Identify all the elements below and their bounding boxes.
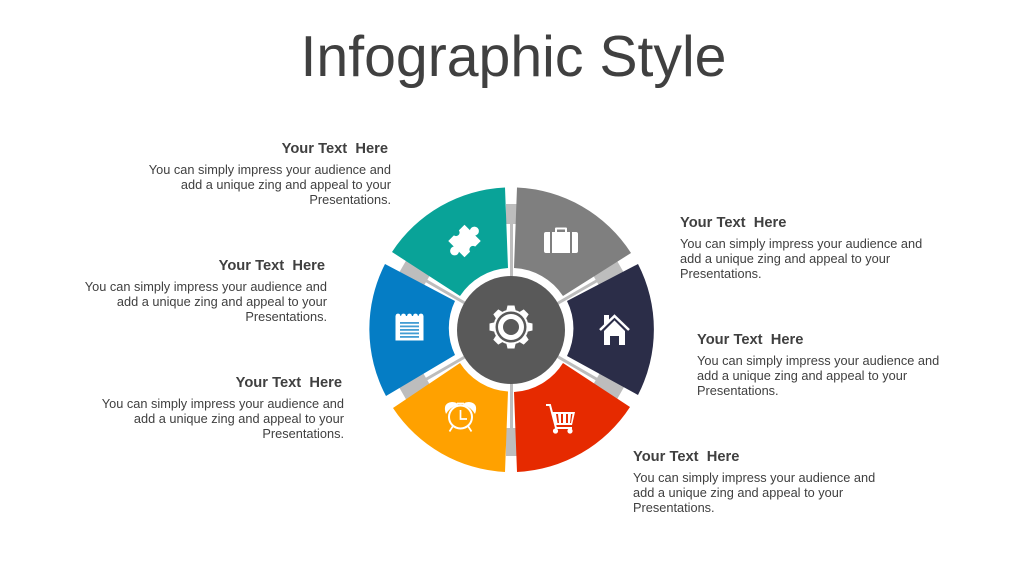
text block: bottom right — [633, 449, 875, 515]
segment: teal — [392, 188, 508, 296]
segment: red — [514, 363, 630, 472]
text block: bottom left — [102, 375, 344, 441]
icon: gear — [490, 306, 532, 348]
text block: bottom right: Your Text Here — [633, 449, 739, 465]
icon: house — [600, 315, 629, 345]
segment: gray — [514, 188, 631, 296]
icon: notebook — [396, 314, 424, 340]
icon: puzzle — [440, 217, 489, 265]
segment: navy — [567, 264, 654, 395]
text block: top left: You can simply impress your audience and add a unique zing and appeal to your Presentations. — [149, 162, 391, 207]
title: Infographic Style — [300, 25, 726, 89]
text block: top right: Your Text Here — [680, 215, 786, 231]
text block: top right — [680, 215, 922, 281]
icon: cart — [546, 405, 575, 434]
text block: bottom right: You can simply impress your audience and add a unique zing and appeal to your Presentations. — [633, 470, 875, 515]
text block: middle right: You can simply impress your audience and add a unique zing and appeal to your Presentations. — [697, 352, 939, 398]
icon: alarm clock — [445, 402, 476, 432]
text block: middle left: You can simply impress your audience and add a unique zing and appeal to your Presentations. — [85, 278, 327, 324]
text block: top right: You can simply impress your audience and add a unique zing and appeal to your Presentations. — [680, 236, 922, 281]
segment: blue — [369, 264, 455, 396]
text block: middle right: Your Text Here — [697, 332, 803, 348]
text block: top left — [149, 141, 391, 207]
text block: top left: Your Text Here — [282, 141, 388, 157]
icon: briefcase — [544, 228, 578, 253]
text block: bottom left: You can simply impress your audience and add a unique zing and appeal to your Presentations. — [102, 396, 344, 441]
center circle — [457, 276, 565, 384]
text block: middle left: Your Text Here — [219, 258, 325, 274]
text block: bottom left: Your Text Here — [236, 375, 342, 391]
text block: middle right — [697, 332, 939, 398]
segment: orange — [393, 363, 508, 472]
text block: middle left — [85, 258, 327, 324]
